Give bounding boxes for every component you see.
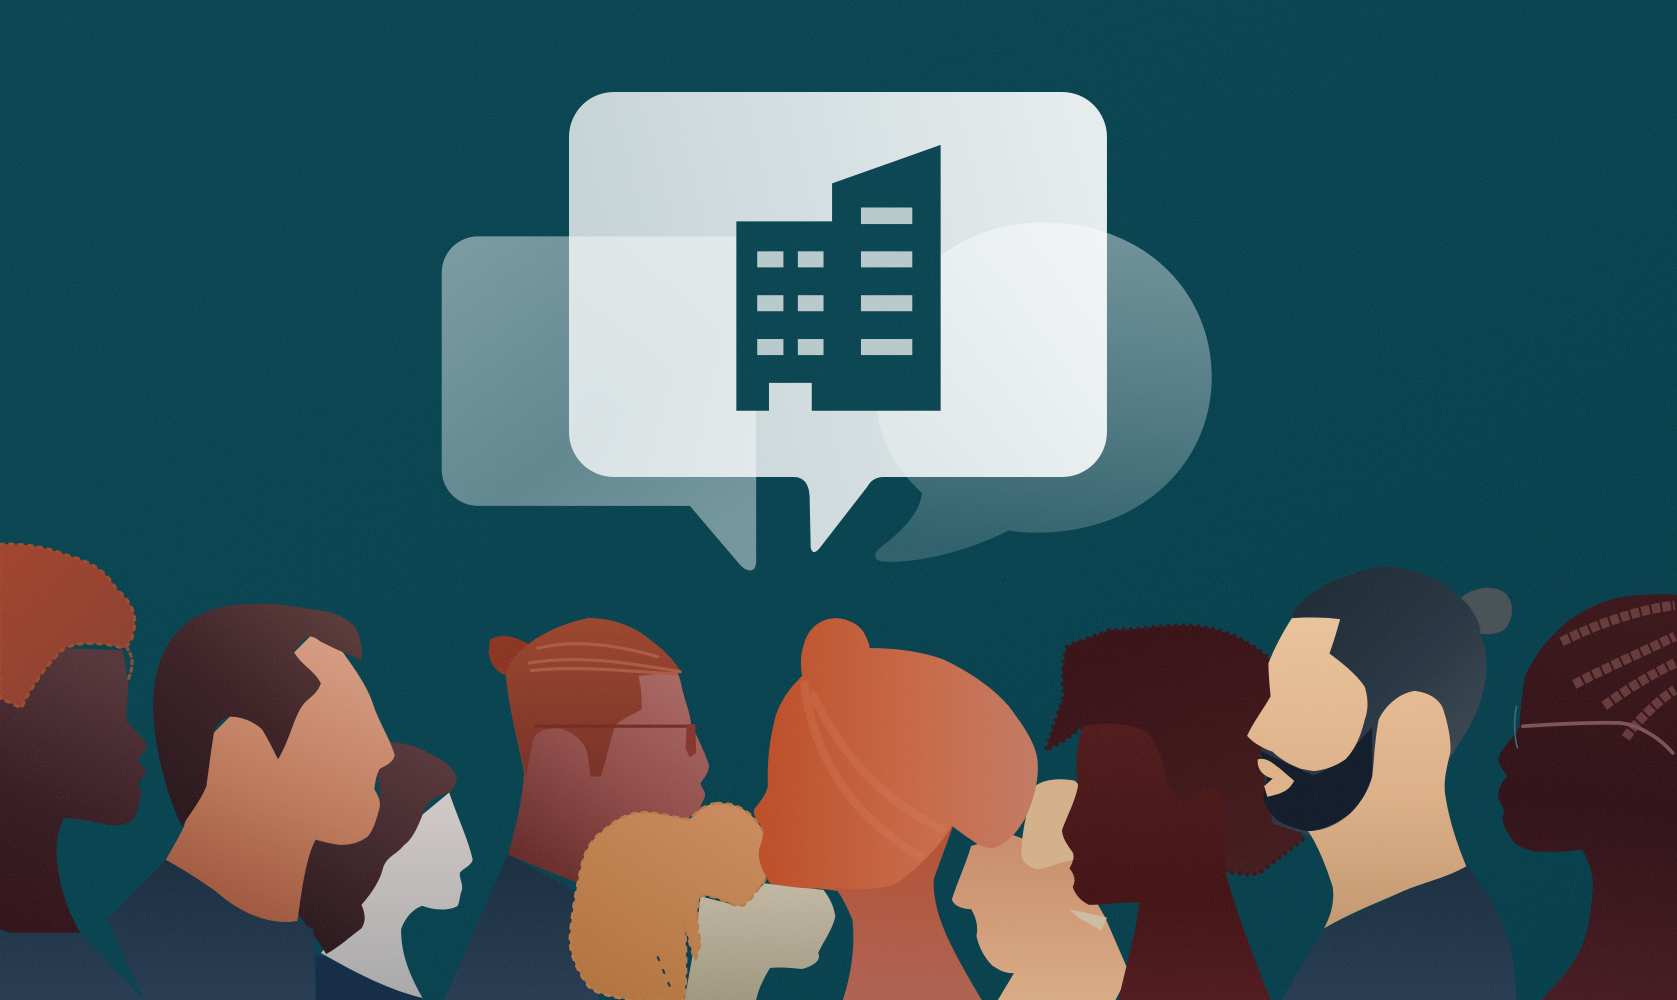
- hair: [153, 604, 362, 827]
- person 4: man with glasses and bun: [444, 618, 709, 1000]
- person 5: woman with curly ponytail: [570, 803, 835, 1000]
- light hair: [1021, 779, 1091, 870]
- collar: [1070, 909, 1107, 930]
- hair stripes: [529, 644, 680, 674]
- braids: [1561, 605, 1675, 738]
- face and neck: [1062, 724, 1271, 1000]
- person 6: orange woman with hair bun: [754, 618, 1038, 1000]
- hair bun: [489, 636, 530, 676]
- face: [684, 883, 835, 1000]
- person 3: small woman with wavy hair: [289, 741, 473, 1000]
- beard: [1260, 727, 1372, 831]
- person 1: curly hair, far left: [0, 544, 148, 1000]
- glasses: [1523, 723, 1673, 753]
- clothing: [1281, 863, 1517, 1000]
- person 8: dark man with beard: [1046, 626, 1303, 1000]
- clothing: [0, 933, 144, 1000]
- hair and beard: [1046, 626, 1303, 874]
- person 7: child behind, facing left: [952, 779, 1129, 1000]
- curl gaps: [658, 957, 672, 989]
- bubble: front white: [569, 92, 1107, 552]
- curly hair: [0, 544, 135, 708]
- building windows: [757, 207, 912, 355]
- mouth: [1258, 759, 1294, 797]
- icon: building: [736, 145, 941, 411]
- hair: [1260, 567, 1487, 856]
- bubble: right back: [875, 222, 1212, 562]
- skin: [506, 618, 709, 887]
- hair wraps: [804, 684, 941, 856]
- hair: [506, 618, 681, 776]
- person 9: bearded man with top knot: [1247, 567, 1517, 1000]
- bubble: left back: [442, 236, 756, 570]
- face: [1247, 617, 1368, 771]
- clothing: [107, 860, 316, 1000]
- person 2: man with short hair: [107, 604, 395, 1000]
- glasses: [535, 725, 690, 755]
- clothing: [444, 855, 599, 1000]
- person 10: right side with braids and glasses: [1498, 594, 1677, 1000]
- speech bubbles and building icon: [442, 92, 1212, 570]
- neck: [770, 824, 982, 1000]
- neck and ear: [1308, 691, 1466, 928]
- skin: [166, 636, 395, 922]
- curly hair: [570, 803, 769, 1000]
- head: [754, 618, 1038, 889]
- hair bun: [1460, 588, 1512, 634]
